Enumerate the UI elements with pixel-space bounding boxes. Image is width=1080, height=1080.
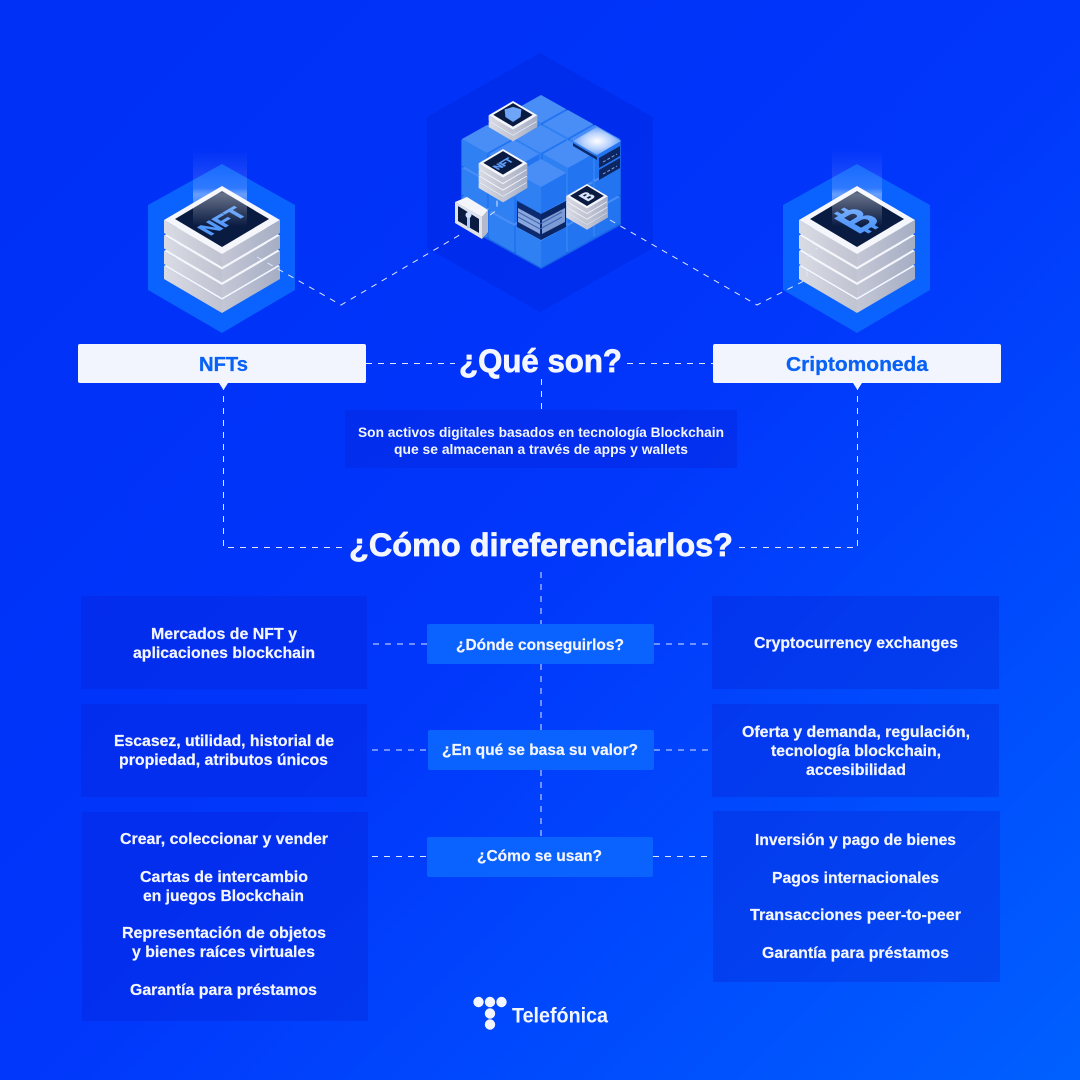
panel: NFT uses: y bienes raíces virtuales	[132, 944, 315, 961]
definition panel	[345, 410, 737, 468]
key box	[455, 197, 488, 239]
panel: crypto where to get: Cryptocurrency exchanges	[754, 635, 958, 652]
NFT stack icon	[148, 150, 295, 333]
hexagon	[783, 164, 930, 333]
panel: NFT where to get: Mercados de NFT y	[151, 626, 297, 643]
diagonal connector lines between icons	[257, 200, 817, 305]
mini stack: NFT: NFT	[491, 157, 517, 172]
panel: crypto uses: Inversión y pago de bienes	[755, 832, 956, 849]
panel: NFT uses: Representación de objetos	[122, 925, 326, 942]
panel: NFT value	[81, 704, 367, 797]
panel: NFT uses: Cartas de intercambio	[140, 869, 308, 886]
Telefónica logo: Telefónica	[512, 1004, 608, 1028]
panel: crypto uses	[713, 811, 1000, 982]
panel: crypto value	[712, 704, 999, 797]
definition panel: que se almacenan a través de apps y wallets	[394, 441, 688, 457]
mini stack: bitcoin: B	[576, 190, 600, 203]
question: value	[428, 730, 654, 770]
light beam	[832, 150, 882, 226]
heading: Qué son: ¿Qué son?	[459, 343, 622, 379]
Telefónica logo	[473, 997, 608, 1030]
panel: crypto uses: Garantía para préstamos	[762, 945, 949, 962]
glowing server block	[573, 127, 621, 180]
panel: NFT where to get: aplicaciones blockchain	[133, 645, 315, 662]
panel: NFT uses: Crear, coleccionar y vender	[120, 831, 328, 848]
heading: Cómo diferenciarlos: ¿Cómo direferenciarlos?	[349, 527, 733, 563]
panel: NFT uses: Garantía para préstamos	[130, 982, 317, 999]
front block	[516, 159, 566, 214]
definition panel: Son activos digitales basados en tecnología Blockchain	[358, 424, 724, 440]
mini stack: shield	[489, 101, 537, 141]
panel: crypto value: Oferta y demanda, regulación,	[742, 724, 970, 741]
cube blocks	[461, 95, 621, 269]
connector lines	[224, 364, 858, 856]
server stack	[164, 186, 280, 313]
question: where to get	[427, 624, 654, 664]
panel: crypto uses: Transacciones peer-to-peer	[750, 907, 961, 924]
panel: NFT value: propiedad, atributos únicos	[119, 752, 328, 769]
NFT label on tile: NFT	[192, 203, 252, 239]
panel: NFT value: Escasez, utilidad, historial de	[114, 733, 334, 750]
question: value: ¿En qué se basa su valor?	[442, 742, 638, 759]
panel: NFT uses	[82, 812, 368, 1021]
question: uses	[427, 837, 653, 877]
panel: crypto value: tecnología blockchain,	[771, 743, 941, 760]
bitcoin symbol on tile: B	[825, 201, 891, 240]
panel: crypto where to get	[712, 596, 999, 689]
Criptomoneda label: Criptomoneda	[786, 354, 929, 376]
panel: NFT where to get	[81, 596, 367, 689]
question: uses: ¿Cómo se usan?	[477, 848, 602, 865]
panel: NFT uses: en juegos Blockchain	[143, 888, 304, 905]
hexagon	[148, 164, 295, 333]
light beam	[193, 150, 247, 226]
hexagon behind cube	[427, 53, 653, 312]
mini stack: NFT	[479, 149, 527, 202]
cryptocurrency stack icon	[783, 150, 930, 333]
question: where to get: ¿Dónde conseguirlos?	[456, 637, 624, 654]
panel: crypto value: accesibilidad	[806, 762, 906, 779]
central blockchain cube illustration	[427, 53, 653, 312]
Criptomoneda label	[713, 344, 1001, 390]
server stack	[799, 186, 915, 313]
server layer in front column	[517, 201, 566, 240]
NFTs label: NFTs	[199, 354, 248, 376]
mini stack: bitcoin	[566, 184, 608, 230]
panel: crypto uses: Pagos internacionales	[772, 870, 939, 887]
NFTs label	[78, 344, 366, 390]
